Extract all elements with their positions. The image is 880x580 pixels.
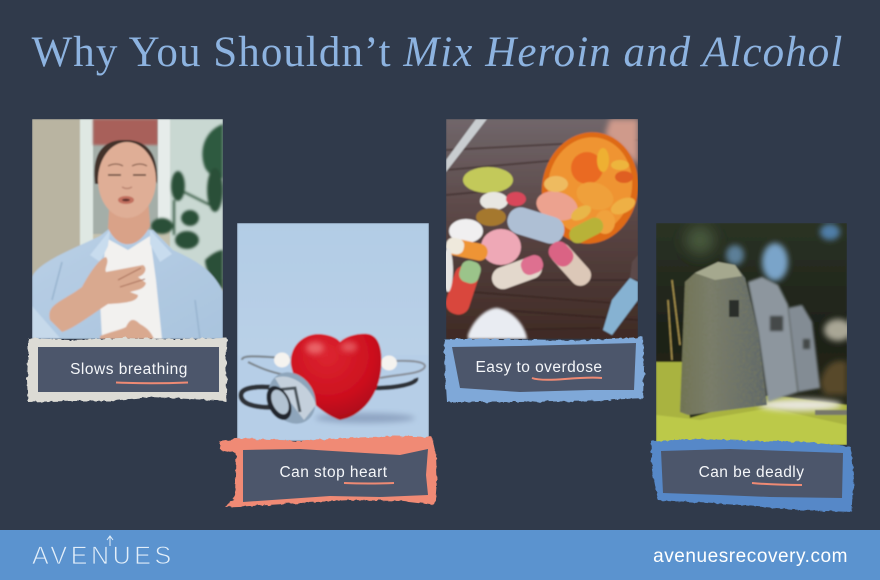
loose pills — [463, 167, 513, 193]
panel: can be deadly — [656, 223, 852, 445]
hand and arm — [49, 257, 146, 332]
torn frame — [651, 439, 854, 512]
underline — [116, 382, 188, 384]
plant — [151, 124, 223, 290]
stethoscope chest piece — [268, 372, 317, 424]
label: can be deadly — [651, 439, 854, 512]
shirt — [32, 228, 223, 339]
panel: can stop heart — [237, 223, 429, 441]
underline — [344, 482, 394, 484]
label text: Easy to overdose — [476, 359, 602, 376]
label: can stop heart — [219, 436, 437, 507]
bottle — [540, 131, 638, 245]
syringe — [603, 278, 638, 335]
torn frame — [27, 338, 227, 402]
panel: slows breathing — [32, 119, 223, 339]
photo: gravestones — [656, 223, 852, 445]
photo: spilled pills and orange bottle — [443, 119, 647, 339]
underline — [532, 378, 602, 380]
website url: avenuesrecovery.com — [653, 546, 848, 567]
label: easy to overdose — [444, 337, 644, 402]
photo: red heart and stethoscope — [237, 223, 429, 441]
logo: avenues: AVENUES — [32, 542, 175, 570]
neck and head — [107, 206, 151, 245]
underline — [752, 483, 802, 485]
torn frame — [219, 436, 437, 507]
torn frame — [444, 337, 644, 402]
label text: Can be deadly — [699, 464, 804, 481]
panel: easy to overdose — [443, 119, 647, 339]
label text: Slows breathing — [70, 361, 188, 378]
photo: woman breathing with hand on chest — [32, 119, 223, 339]
title: Why You Shouldn’t Mix Heroin and Alcohol — [32, 29, 843, 76]
front stone — [680, 262, 767, 415]
label text: Can stop heart — [280, 464, 388, 481]
label: slows breathing — [27, 338, 227, 402]
footer bar — [0, 530, 880, 580]
rear stones — [788, 305, 820, 392]
